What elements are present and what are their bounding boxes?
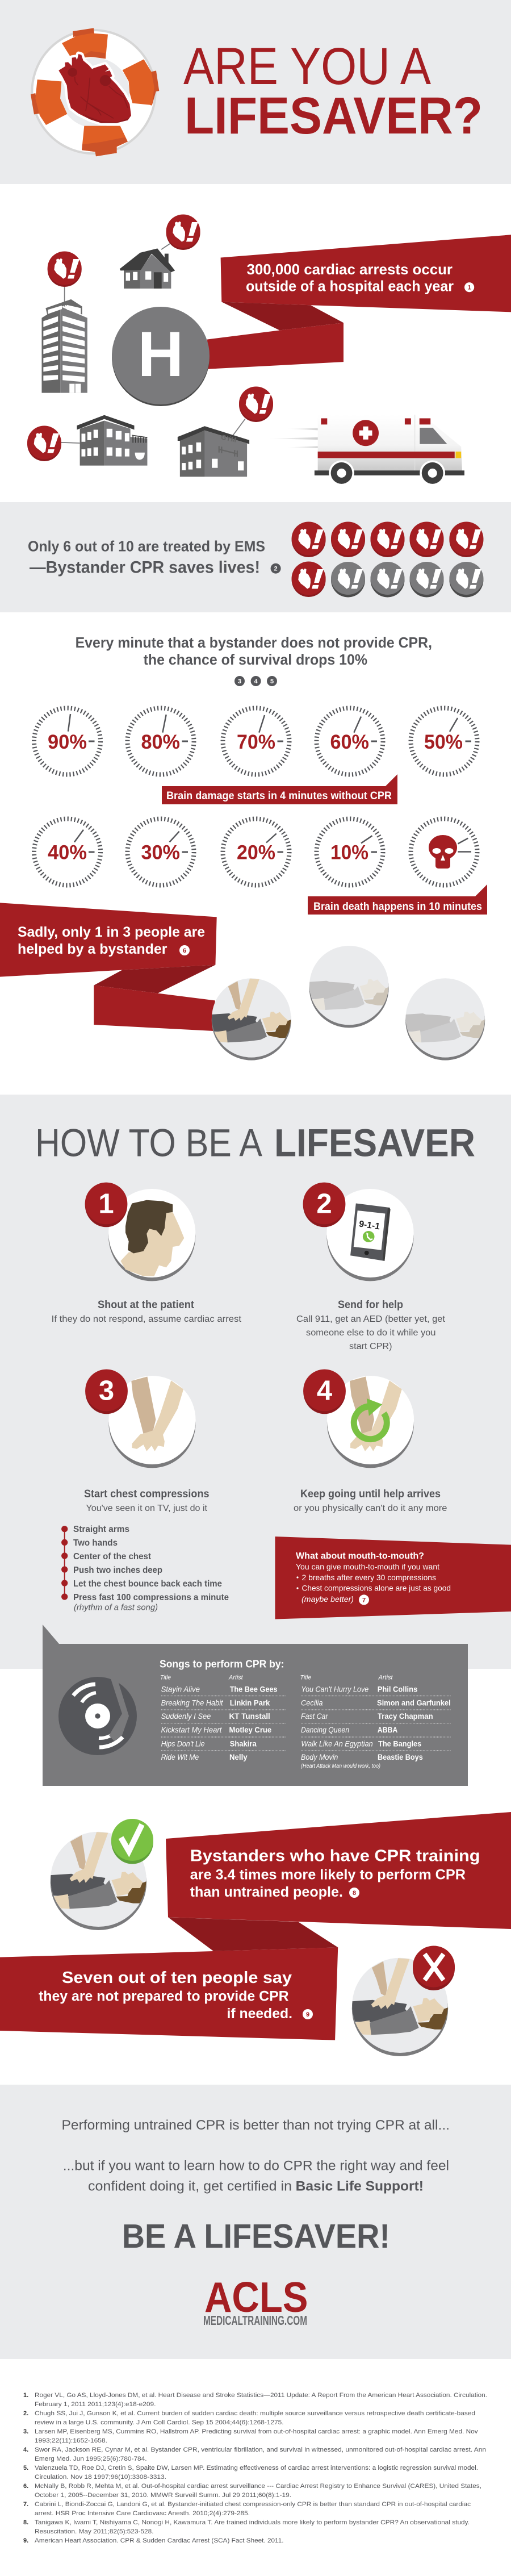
step 4 text	[294, 1488, 447, 1513]
clock 20%: 20%	[237, 842, 275, 863]
references: review in a large U.S. community. J Am Coll Cardiol. Sep 15 2004;44(6):1268-1275.	[35, 2419, 284, 2426]
checklist: Two hands	[73, 1538, 118, 1548]
icon: office tower	[41, 287, 87, 393]
song table: Stayin Alive	[161, 1684, 200, 1693]
references: Cabrini L, Biondi-Zoccai G, Landoni G, et al. Bystander-initiated chest compression-only CPR is better than standard CPR in out-of-hospital cardiac	[35, 2501, 471, 2508]
references: Valenzuela TD, Roe DJ, Cretin S, Spaite DW, Larsen MP. Estimating effectiveness of cardiac arrest interventions: a logistic regression survival model.	[35, 2465, 478, 2471]
EMS text: Only 6 out of 10 are treated by EMS	[28, 538, 265, 555]
song table: Nelly	[229, 1752, 248, 1761]
song table: (Heart Attack Man would work, too)	[301, 1763, 380, 1769]
EMS text: —Bystander CPR saves lives!	[30, 558, 260, 577]
ribbon text: helped by a bystander	[18, 941, 167, 957]
icon: gym building	[178, 419, 249, 477]
column labels: Title	[160, 1675, 171, 1681]
badge: X	[413, 1946, 455, 1990]
references: 1993;22(11):1652-1658.	[35, 2437, 107, 2444]
references: 3.	[23, 2428, 28, 2435]
icon: hospital H	[112, 307, 210, 406]
pictogram: 6 of 10	[292, 521, 483, 598]
red ribbon	[0, 903, 217, 1031]
alert badge: cafe	[27, 426, 61, 461]
clock 40%	[34, 819, 100, 885]
panel: survival clocks	[34, 634, 487, 915]
step 3: 3	[99, 1376, 114, 1406]
references: 1.	[23, 2392, 28, 2399]
heading: 4	[254, 678, 258, 685]
clock: skull	[411, 819, 477, 885]
callout: brain death	[308, 884, 487, 915]
song table: Walk Like An Egyptian	[301, 1739, 373, 1748]
clock 30%	[127, 819, 194, 885]
song table: KT Tunstall	[229, 1711, 270, 1721]
references: October 1, 2005--December 31, 2010. MMWR Surveill Summ. Jul 29 2011;60(8):1-19.	[35, 2492, 291, 2499]
checklist: Let the chest bounce back each time	[73, 1579, 222, 1589]
song table: Simon and Garfunkel	[377, 1698, 451, 1707]
references: 6.	[23, 2483, 28, 2490]
step 1 text: If they do not respond, assume cardiac arrest	[52, 1314, 242, 1324]
step 2: 2	[316, 1189, 332, 1220]
clock 70%: 70%	[237, 731, 275, 753]
title: ARE YOU A	[183, 37, 432, 95]
clock 40%: 40%	[48, 842, 87, 863]
trained text: Bystanders who have CPR training	[190, 1847, 480, 1865]
gym sign: GYM	[220, 433, 237, 444]
clock 20%	[223, 819, 290, 885]
heading: 5	[270, 678, 274, 685]
icon: cafe building	[61, 415, 147, 466]
EMS text	[28, 538, 281, 577]
heading: HOW TO BE A	[35, 1121, 262, 1165]
closing text: ...but if you want to learn how to do CPR the right way and feel	[63, 2159, 449, 2174]
illustration: arms	[131, 1376, 183, 1451]
checklist: Straight arms	[73, 1525, 129, 1534]
references: Roger VL, Go AS, Lloyd-Jones DM, et al. Heart Disease and Stroke Statistics—2011 Update: A Report From the American Heart Association. Circulation.	[35, 2392, 487, 2399]
song table: Body Movin	[301, 1752, 338, 1761]
clock 50%: 50%	[424, 731, 463, 753]
clock 80%: 80%	[141, 731, 180, 753]
step 4	[303, 1370, 414, 1468]
badge: check	[111, 1819, 153, 1864]
callout: mouth to mouth: Chest compressions alone are just as good	[302, 1584, 451, 1593]
clock 30%: 30%	[141, 842, 180, 863]
song table: Suddenly I See	[161, 1711, 211, 1721]
references: Emerg Med. Jun 1995;25(6):780-784.	[35, 2456, 146, 2462]
closing text: confident doing it, get certified in	[88, 2179, 292, 2194]
trained text: 8	[353, 1890, 356, 1897]
alert badge: house	[166, 215, 200, 250]
panel: header	[0, 0, 511, 184]
panel: songs	[43, 1625, 468, 1786]
step 1: 1	[98, 1189, 114, 1220]
heading	[35, 1121, 475, 1165]
step 2 text: Call 911, get an AED (better yet, get	[296, 1314, 446, 1324]
step 1	[85, 1183, 195, 1281]
checklist: Press fast 100 compressions a minute	[73, 1593, 229, 1602]
illustration: unprepared bystander	[352, 1958, 448, 2056]
clock 10%	[317, 819, 383, 885]
callout: brain death: Brain death happens in 10 minutes	[313, 901, 482, 913]
step 4: 4	[317, 1376, 332, 1406]
column labels	[160, 1675, 393, 1681]
heading: 3	[238, 678, 241, 685]
illustration: phone	[350, 1203, 391, 1261]
clock 70%	[223, 708, 290, 775]
clock 60%: 60%	[330, 731, 369, 753]
panel: training stats	[0, 1812, 511, 2056]
ribbon text: 6	[183, 947, 186, 954]
references: 9.	[23, 2537, 28, 2544]
clock 90%	[34, 708, 100, 775]
step 2	[303, 1183, 414, 1281]
not prepared text: if needed.	[227, 2006, 292, 2022]
step 3 text: You've seen it on TV, just do it	[86, 1504, 208, 1513]
illustration: CPR given	[212, 978, 291, 1061]
song table: Phil Collins	[378, 1684, 417, 1693]
song table: Tracy Chapman	[378, 1711, 433, 1721]
ribbon text: 1	[468, 285, 471, 291]
song table: Hips Don't Lie	[161, 1739, 205, 1748]
trained text: than untrained people.	[190, 1884, 343, 1900]
callout: mouth to mouth: You can give mouth-to-mouth if you want	[296, 1562, 439, 1571]
song table: Beastie Boys	[378, 1752, 423, 1761]
references: February 1, 2011 2011;123(4):e18-e209.	[35, 2401, 156, 2408]
step 3 text	[84, 1488, 209, 1513]
column labels: Artist	[378, 1675, 393, 1681]
references	[23, 2392, 487, 2544]
step 2 text	[296, 1299, 446, 1351]
not prepared text: Seven out of ten people say	[62, 1969, 292, 1987]
panel: out of hospital arrests	[27, 215, 511, 486]
closing text	[61, 2118, 450, 2194]
songs heading: Songs to perform CPR by:	[160, 1658, 284, 1669]
call to action: BE A LIFESAVER!	[122, 2218, 390, 2255]
ribbon text: 300,000 cardiac arrests occur	[246, 261, 453, 278]
song table: The Bangles	[378, 1739, 421, 1748]
column labels: Artist	[228, 1675, 244, 1681]
ribbon text: outside of a hospital each year	[246, 278, 454, 295]
phone screen number: 9-1-1	[358, 1219, 380, 1231]
references: American Heart Association. CPR & Sudden Cardiac Arrest (SCA) Fact Sheet. 2011.	[35, 2537, 284, 2544]
song table: Dancing Queen	[301, 1725, 349, 1734]
icon: house	[120, 243, 175, 289]
checklist: Push two inches deep	[73, 1565, 162, 1575]
references: Chugh SS, Jui J, Gunson K, et al. Current burden of sudden cardiac death: multiple source surveillance versus retrospective death certificate-based	[35, 2410, 475, 2417]
song table: The Bee Gees	[230, 1684, 278, 1693]
references: arrest. HSR Proc Intensive Care Cardiovasc Anesth. 2010;2(4):279-285.	[35, 2510, 250, 2517]
panel: closing	[0, 2085, 511, 2359]
song table	[161, 1684, 451, 1769]
song table: Fast Car	[301, 1711, 329, 1721]
not prepared text	[39, 1969, 313, 2022]
song table: Ride Wit Me	[161, 1752, 199, 1761]
callout: mouth to mouth: What about mouth-to-mouth?	[296, 1551, 424, 1561]
references: Tanigawa K, Iwami T, Nishiyama C, Nonogi H, Kawamura T. Are trained individuals more likely to perform bystander CPR? An observational study.	[35, 2519, 470, 2526]
closing text: Performing untrained CPR is better than not trying CPR at all...	[61, 2118, 450, 2133]
step 4 text: or you physically can't do it any more	[294, 1504, 447, 1513]
closing text: Basic Life Support!	[296, 2179, 424, 2194]
song table: Shakira	[230, 1739, 257, 1748]
column labels: Title	[300, 1675, 311, 1681]
step 4 text: Keep going until help arrives	[300, 1488, 441, 1500]
step 2 text: start CPR)	[349, 1342, 392, 1351]
trained text: are 3.4 times more likely to perform CPR	[190, 1867, 466, 1883]
icon: repeat arrow	[354, 1398, 387, 1439]
alert badge: office	[48, 251, 82, 287]
title: LIFESAVER?	[185, 87, 483, 145]
heading	[76, 634, 432, 686]
references: 4.	[23, 2446, 28, 2453]
not prepared text: they are not prepared to provide CPR	[39, 1989, 289, 2005]
panel: treated by EMS	[0, 502, 511, 612]
not prepared text: 9	[306, 2011, 309, 2018]
callout: mouth to mouth: 7	[362, 1597, 366, 1604]
logo: ACLS	[204, 2273, 308, 2321]
clock 50%	[411, 708, 477, 775]
heading: LIFESAVER	[274, 1121, 475, 1165]
illustration: trained bystander	[51, 1832, 146, 1930]
clock 80%	[127, 708, 194, 775]
references: Larsen MP, Eisenberg MS, Cummins RO, Hallstrom AP. Predicting survival from out-of-hospital cardiac arrest: a graphic model. Ann Emerg Med. Nov	[35, 2428, 478, 2435]
callout: mouth to mouth: (maybe better)	[301, 1594, 354, 1604]
checklist: (rhythm of a fast song)	[74, 1602, 158, 1612]
illustration: no CPR, right	[405, 978, 485, 1061]
panel: how to be a lifesaver	[0, 1095, 511, 1669]
checklist	[61, 1525, 229, 1612]
song table: ABBA	[378, 1725, 397, 1734]
ribbon text: Sadly, only 1 in 3 people are	[18, 924, 205, 940]
step 2 text: someone else to do it while you	[306, 1328, 436, 1338]
references: Swor RA, Jackson RE, Cynar M, et al. Bystander CPR, ventricular fibrillation, and survival in witnessed, unmonitored out-of-hospital cardiac arrest. Ann	[35, 2446, 486, 2453]
callout: brain damage	[162, 774, 397, 804]
callout: brain damage: Brain damage starts in 4 minutes without CPR	[166, 790, 392, 802]
icon: hospital H: H	[138, 319, 183, 390]
step 3 text: Start chest compressions	[84, 1488, 209, 1500]
song table: Motley Crue	[229, 1725, 271, 1734]
icon: life ring with heart	[31, 28, 159, 156]
step 1 text	[52, 1299, 242, 1324]
ribbon text	[18, 924, 205, 957]
clock 90%: 90%	[48, 731, 87, 753]
callout: mouth to mouth	[275, 1537, 511, 1619]
song table: Breaking The Habit	[161, 1698, 224, 1707]
references: Resuscitation. May 2011;82(5):523-528.	[35, 2528, 153, 2535]
icon: ambulance	[267, 415, 464, 486]
checklist: Center of the chest	[73, 1552, 152, 1562]
references: 5.	[23, 2465, 28, 2471]
references: 7.	[23, 2501, 28, 2508]
title	[183, 37, 483, 145]
illustration: arms and repeat arrow	[350, 1376, 402, 1451]
song table: Cecilia	[301, 1698, 323, 1707]
heading: Every minute that a bystander does not provide CPR,	[76, 634, 432, 651]
icon: vinyl record	[58, 1677, 137, 1755]
song table: Linkin Park	[230, 1698, 270, 1707]
clock 10%: 10%	[330, 842, 368, 863]
ribbon text	[246, 261, 474, 295]
alert badge: gym	[239, 386, 273, 422]
clock 60%	[317, 708, 383, 775]
song table: Kickstart My Heart	[161, 1725, 222, 1734]
references: McNally B, Robb R, Mehta M, et al. Out-of-hospital cardiac arrest surveillance --- Cardiac Arrest Registry to Enhance Survival (CARES), United States,	[35, 2483, 481, 2490]
illustration: shouting head	[120, 1200, 184, 1276]
references: Circulation. Nov 18 1997;96(10):3308-3313.	[35, 2474, 166, 2481]
logo: MEDICALTRAINING.COM	[203, 2313, 307, 2328]
step 2 text: Send for help	[338, 1299, 403, 1311]
references: 2.	[23, 2410, 28, 2417]
callout: mouth to mouth: 2 breaths after every 30 compressions	[302, 1573, 436, 1582]
song table: You Can't Hurry Love	[301, 1684, 368, 1693]
panel: one in three helped	[0, 903, 485, 1061]
red ribbon	[0, 1812, 511, 2040]
EMS text: 2	[274, 566, 278, 573]
red ribbon	[207, 235, 511, 369]
trained text	[190, 1847, 480, 1900]
illustration: no CPR, middle	[309, 946, 389, 1028]
step 1 text: Shout at the patient	[98, 1299, 195, 1311]
references: 8.	[23, 2519, 28, 2526]
step 3	[85, 1370, 196, 1468]
heading: the chance of survival drops 10%	[144, 651, 367, 668]
